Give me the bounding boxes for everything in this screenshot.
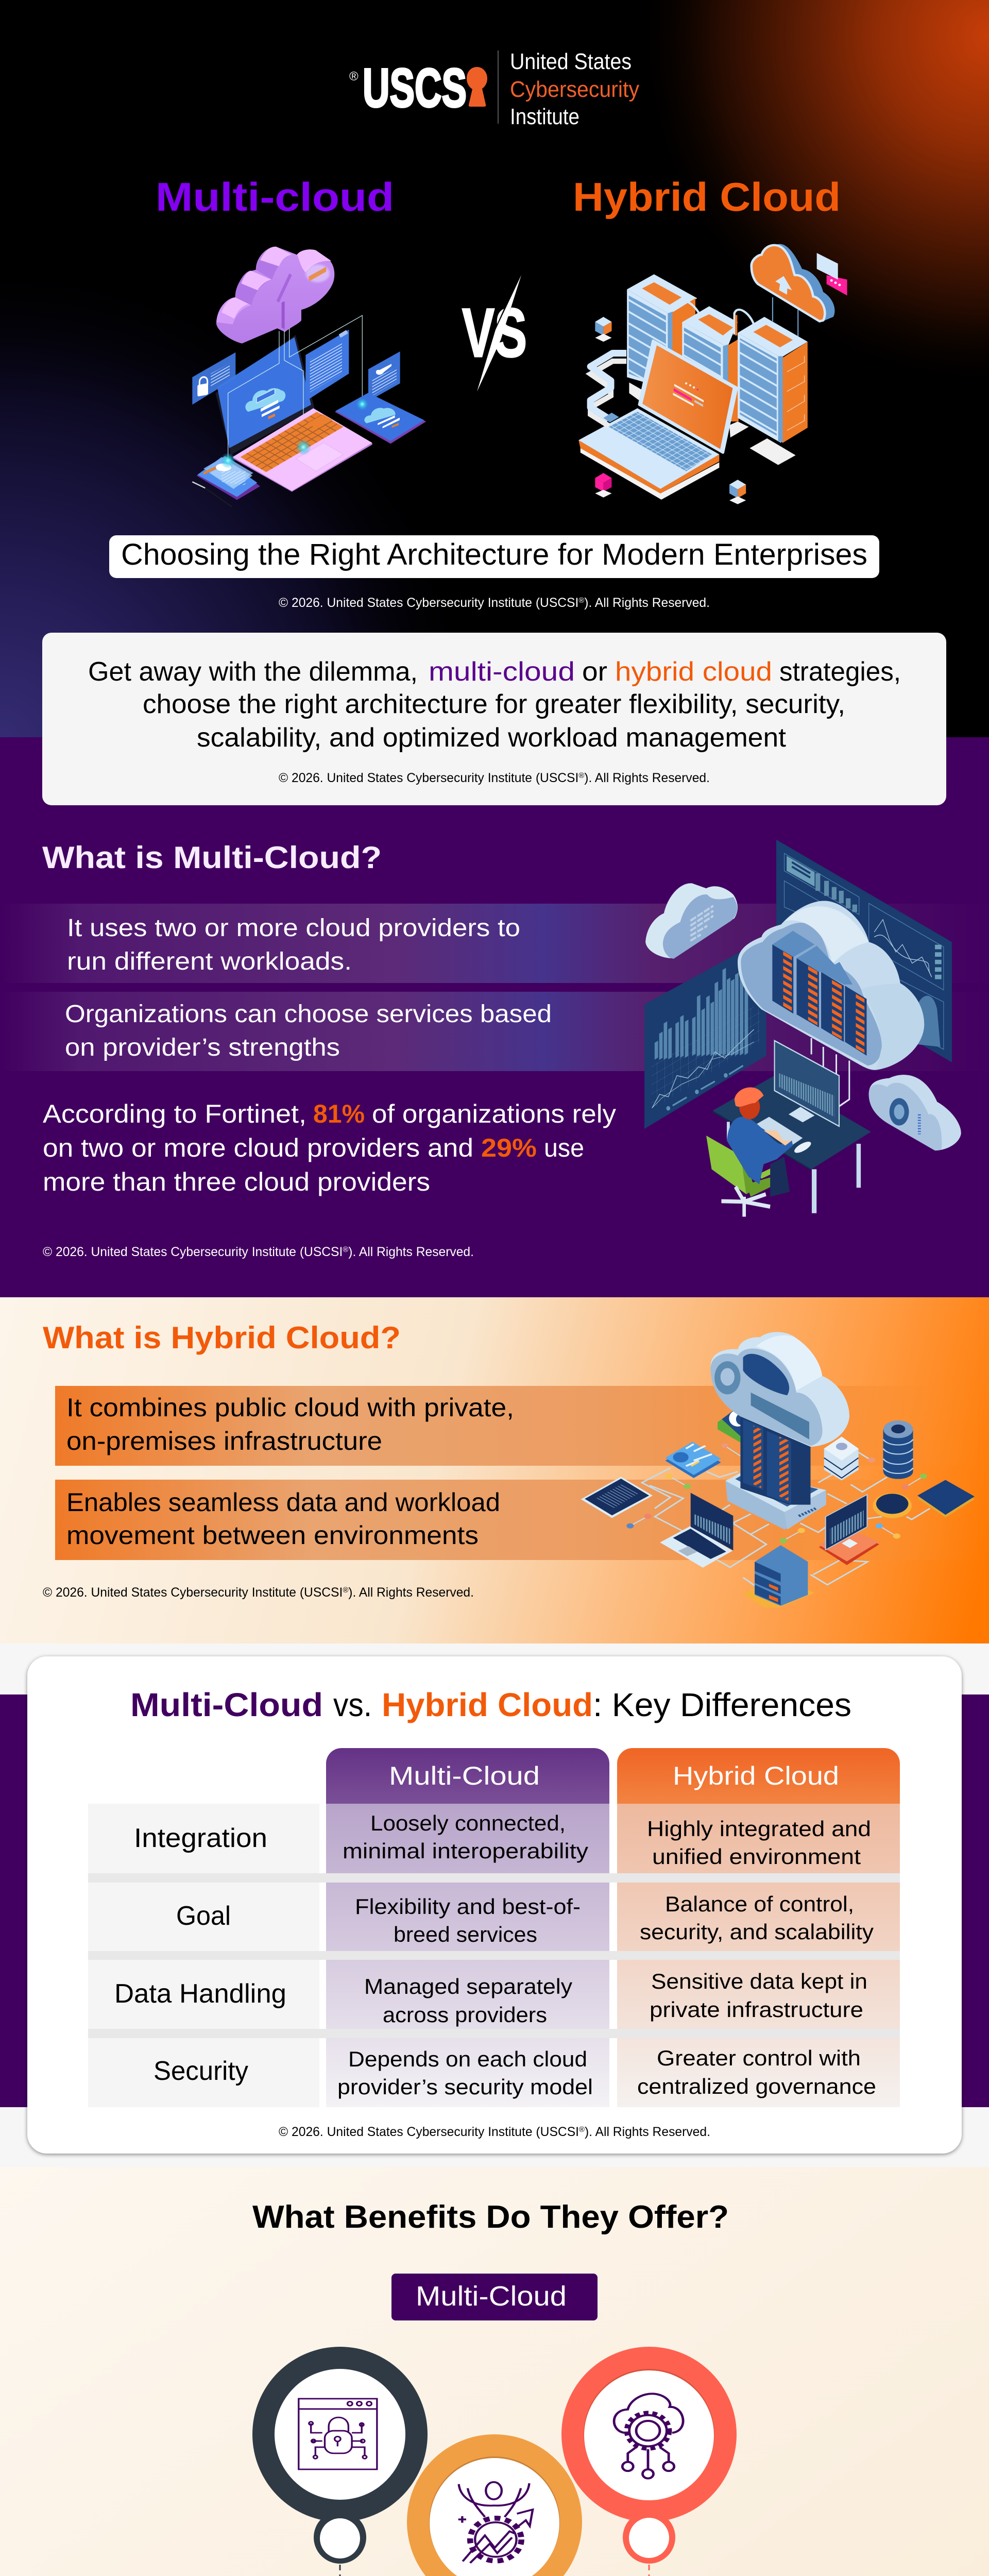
- multi-cloud points: on provider’s strengths: [65, 1034, 340, 1061]
- heading: Multi-cloud: Multi-cloud: [156, 174, 394, 219]
- row: goal: breed services: [394, 1922, 537, 1946]
- header section: [0, 0, 989, 737]
- cylinder: [883, 1420, 913, 1479]
- band: point one: on-premises infrastructure: [66, 1427, 382, 1455]
- floor pad: [749, 438, 796, 465]
- copyright: © 2026. United States Cybersecurity Institute (USCSI: [279, 2125, 583, 2139]
- intro card: Get away with the dilemma,: [88, 657, 418, 687]
- multi-cloud section background: [0, 737, 989, 1297]
- dashboard tile: [665, 1442, 721, 1478]
- band: point two: Enables seamless data and workload: [66, 1488, 500, 1517]
- multi-cloud points: Organizations can choose services based: [65, 1001, 552, 1028]
- small cloud top left: [645, 883, 738, 959]
- logo: ®: [349, 70, 359, 83]
- table title: [130, 1686, 851, 1723]
- illustration: hybrid network tower: [581, 1332, 975, 1607]
- intro card: [42, 633, 946, 805]
- laptop edge: [233, 443, 372, 492]
- copyright: ®: [343, 1245, 348, 1254]
- multi-cloud points: It uses two or more cloud providers to: [67, 914, 520, 942]
- server rack 2: [682, 306, 739, 421]
- row: data handling: Managed separately: [364, 1974, 572, 1998]
- benefit: avoids vendor lock-in: [252, 2347, 428, 2576]
- row: security: Security: [154, 2056, 248, 2086]
- phone: [197, 456, 260, 500]
- laptop: [660, 1493, 733, 1568]
- intro card: ). All Rights Reserved.: [584, 771, 710, 785]
- copyright: ®: [579, 2125, 585, 2134]
- Fortinet statistic: of organizations rely: [372, 1099, 616, 1128]
- band: point one: [55, 1386, 979, 1466]
- benefit: specialized capabilities: [558, 2347, 737, 2576]
- row: data handling: private infrastructure: [650, 1997, 863, 2022]
- Fortinet statistic: on two or more cloud providers and: [43, 1133, 473, 1162]
- intro card: © 2026. United States Cybersecurity Institute (USCSI: [279, 771, 583, 785]
- circuit lines: [642, 1452, 930, 1586]
- row: integration: unified environment: [652, 1844, 861, 1869]
- benefits section background: [0, 2167, 989, 2576]
- row: security: centralized governance: [637, 2074, 876, 2098]
- cloud: [216, 247, 334, 344]
- subtitle banner: Choosing the Right Architecture for Modern Enterprises: [121, 538, 867, 571]
- keyboard: [241, 412, 344, 472]
- row: integration: [88, 1804, 900, 1873]
- copyright: ). All Rights Reserved.: [584, 596, 710, 610]
- row: data handling: Data Handling: [114, 1979, 286, 2009]
- servers in cloud: [772, 931, 866, 1056]
- heading: what is hybrid cloud: What is Hybrid Cloud?: [43, 1320, 401, 1355]
- purple backdrop of comparison: [0, 1694, 989, 2107]
- intro card: multi-cloud: [429, 657, 575, 687]
- row: goal: security, and scalability: [640, 1920, 874, 1944]
- logo: Institute: [510, 104, 579, 129]
- cable link accent: [733, 315, 739, 335]
- intro card: or: [582, 657, 607, 687]
- cloud: [710, 1332, 849, 1447]
- table title: Multi-Cloud: [130, 1686, 323, 1723]
- cubes: [595, 317, 746, 504]
- row: security: provider’s security model: [337, 2075, 593, 2099]
- icon: cloud gear: [614, 2394, 683, 2479]
- central cloud: [738, 901, 924, 1070]
- copyright: © 2026. United States Cybersecurity Institute (USCSI: [43, 1585, 347, 1600]
- intro card: ®: [578, 771, 584, 780]
- laptop screen: [215, 335, 315, 455]
- base and tower: [725, 1416, 826, 1530]
- desk: [713, 1076, 871, 1213]
- row: data handling: [88, 1960, 900, 2029]
- heading: what is multi-cloud: What is Multi-Cloud?: [42, 840, 382, 875]
- band: point two: [55, 1480, 979, 1560]
- table title: Hybrid Cloud: [382, 1686, 593, 1723]
- stacked cube: [824, 1437, 859, 1481]
- row: integration: Loosely connected,: [370, 1811, 566, 1835]
- benefit: enhanced resilience: [394, 2434, 594, 2576]
- multi-cloud points: [65, 914, 552, 1061]
- illustration: hybrid cloud servers and laptop: [578, 244, 847, 504]
- VS mark: VS: [462, 295, 527, 371]
- logo: [349, 49, 639, 129]
- logo: USCS: [363, 58, 467, 118]
- cable: [590, 353, 626, 426]
- tablet: [581, 1477, 653, 1518]
- label: multi-cloud: Multi-Cloud: [416, 2281, 567, 2312]
- comparison card: [27, 1656, 962, 2154]
- intro card: choose the right architecture for greater flexibility, security,: [143, 689, 845, 719]
- server rack 1: [627, 274, 697, 414]
- coin: [873, 1493, 912, 1518]
- cloud: [752, 244, 835, 336]
- column header: hybrid cloud: Hybrid Cloud: [673, 1761, 839, 1790]
- server stack: [743, 1545, 814, 1607]
- icon: secure window: [299, 2399, 377, 2469]
- row: data handling: across providers: [383, 2003, 547, 2027]
- logo: United States: [510, 49, 632, 74]
- wires: [811, 1038, 849, 1106]
- column header: hybrid cloud: [617, 1748, 900, 1804]
- icon: person with gear: [458, 2482, 533, 2563]
- VS mark: [462, 275, 527, 392]
- copyright: ®: [578, 596, 584, 605]
- row: security: Greater control with: [657, 2046, 861, 2070]
- copyright: ). All Rights Reserved.: [585, 2125, 710, 2139]
- copyright: ). All Rights Reserved.: [348, 1245, 474, 1259]
- row: security: [88, 2038, 900, 2107]
- row: integration: minimal interoperability: [343, 1839, 588, 1863]
- data links: [228, 315, 362, 461]
- Fortinet statistic: 29%: [481, 1133, 537, 1162]
- laptop base: [233, 408, 372, 491]
- chair: [706, 1136, 785, 1217]
- heading: Hybrid Cloud: Hybrid Cloud: [573, 174, 841, 219]
- Fortinet statistic: [43, 1099, 616, 1196]
- operator: [727, 1088, 793, 1197]
- floating window: lock: [192, 352, 235, 404]
- highlight bands: [0, 904, 989, 1071]
- chip: [917, 1480, 975, 1518]
- copyright: ). All Rights Reserved.: [348, 1585, 474, 1600]
- connector nodes: [626, 1443, 927, 1543]
- intro card: strategies,: [779, 657, 901, 687]
- Fortinet statistic: 81%: [313, 1099, 365, 1128]
- column header: multi-cloud: Multi-Cloud: [389, 1761, 540, 1790]
- row: goal: Goal: [176, 1901, 231, 1931]
- floating window: key: [368, 351, 400, 401]
- table title: : Key Differences: [593, 1686, 851, 1723]
- table: [88, 1748, 900, 2107]
- dial module: [718, 1407, 751, 1444]
- left chart panel: [644, 948, 766, 1129]
- tablet: [335, 393, 426, 444]
- cable links: [678, 300, 754, 334]
- heading: what benefits: What Benefits Do They Offer?: [252, 2199, 729, 2235]
- trackpad: [296, 443, 344, 471]
- copyright: © 2026. United States Cybersecurity Institute (USCSI: [43, 1245, 347, 1259]
- row: integration: Highly integrated and: [647, 1817, 871, 1841]
- Fortinet statistic: more than three cloud providers: [43, 1167, 430, 1196]
- logo: Cybersecurity: [510, 77, 639, 102]
- column header: multi-cloud: [326, 1748, 609, 1804]
- row: integration: Integration: [134, 1823, 267, 1853]
- illustration: multi-cloud laptop and cloud: [192, 247, 426, 506]
- monitor: [775, 1041, 839, 1126]
- monitor with stand: [819, 1495, 879, 1565]
- floating window: document: [305, 330, 349, 401]
- multi-cloud points: run different workloads.: [67, 948, 352, 975]
- row: data handling: Sensitive data kept in: [651, 1969, 867, 1993]
- back dashboard panel: [776, 840, 952, 1062]
- server rack 3: [738, 317, 808, 443]
- hybrid cloud section: [0, 1297, 989, 1643]
- Fortinet statistic: According to Fortinet,: [43, 1099, 306, 1128]
- intro card: scalability, and optimized workload management: [197, 723, 787, 753]
- laptop: [578, 341, 749, 500]
- keyboard: [756, 1117, 803, 1147]
- table title: vs.: [333, 1686, 372, 1723]
- band: point one: It combines public cloud with private,: [66, 1393, 514, 1422]
- copyright: ®: [343, 1586, 348, 1595]
- copyright: © 2026. United States Cybersecurity Institute (USCSI: [279, 596, 583, 610]
- row: goal: [88, 1883, 900, 1951]
- row: goal: Flexibility and best-of-: [355, 1894, 581, 1919]
- mouse: [793, 1140, 812, 1155]
- row: security: Depends on each cloud: [348, 2047, 587, 2071]
- row: goal: Balance of control,: [665, 1892, 854, 1916]
- stylus: [192, 482, 205, 488]
- label: multi-cloud: [391, 2274, 598, 2320]
- chat bubbles: [817, 253, 847, 296]
- small cloud bottom right: [869, 1075, 961, 1150]
- Fortinet statistic: use: [544, 1133, 584, 1162]
- intro card: hybrid cloud: [615, 657, 772, 687]
- band: point two: movement between environments: [66, 1521, 479, 1550]
- illustration: operator with cloud servers: [644, 840, 961, 1217]
